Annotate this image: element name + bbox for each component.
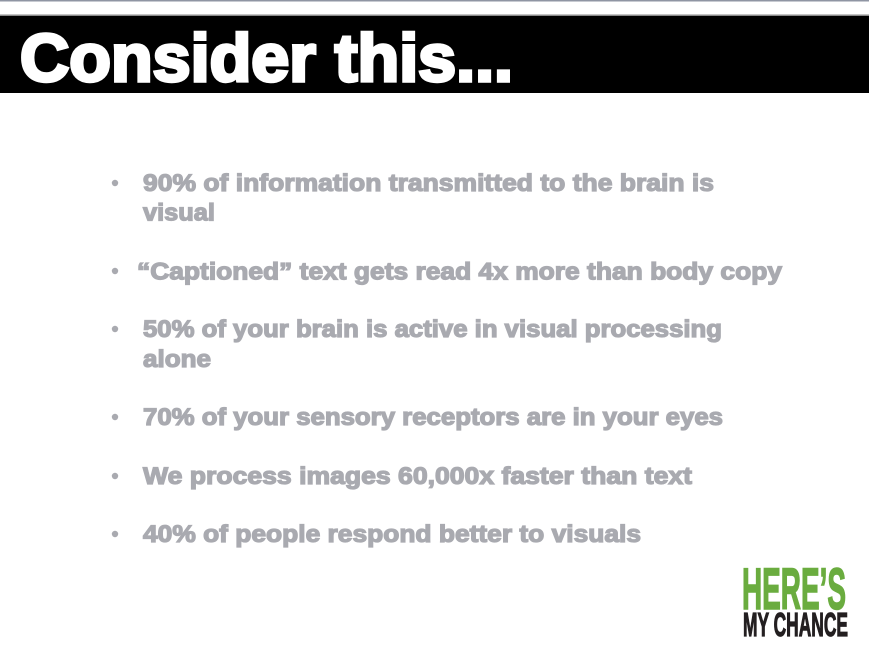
bullet: captioned text: “Captioned” text gets read 4x more than body copy [137, 258, 782, 286]
bullet: 70% receptors: 70% of your sensory receptors are in your eyes [143, 404, 723, 431]
bullet: 90% visual [112, 170, 714, 226]
bullet: 40% visuals: 40% of people respond better to visuals [143, 521, 641, 548]
logo: Here's My Chance [742, 557, 848, 643]
bullet: 90% visual: visual [143, 200, 215, 226]
title: Consider this... [20, 21, 513, 96]
bullet: 50% brain [112, 316, 722, 373]
title banner [0, 14, 869, 96]
bullet: 60,000x faster: We process images 60,000x faster than text [143, 463, 692, 490]
bullet list [112, 170, 782, 548]
bullet: 50% brain: alone [143, 346, 211, 373]
bullet: 50% brain: 50% of your brain is active in visual processing [143, 316, 722, 343]
bullet: 90% visual: 90% of information transmitted to the brain is [143, 170, 714, 197]
